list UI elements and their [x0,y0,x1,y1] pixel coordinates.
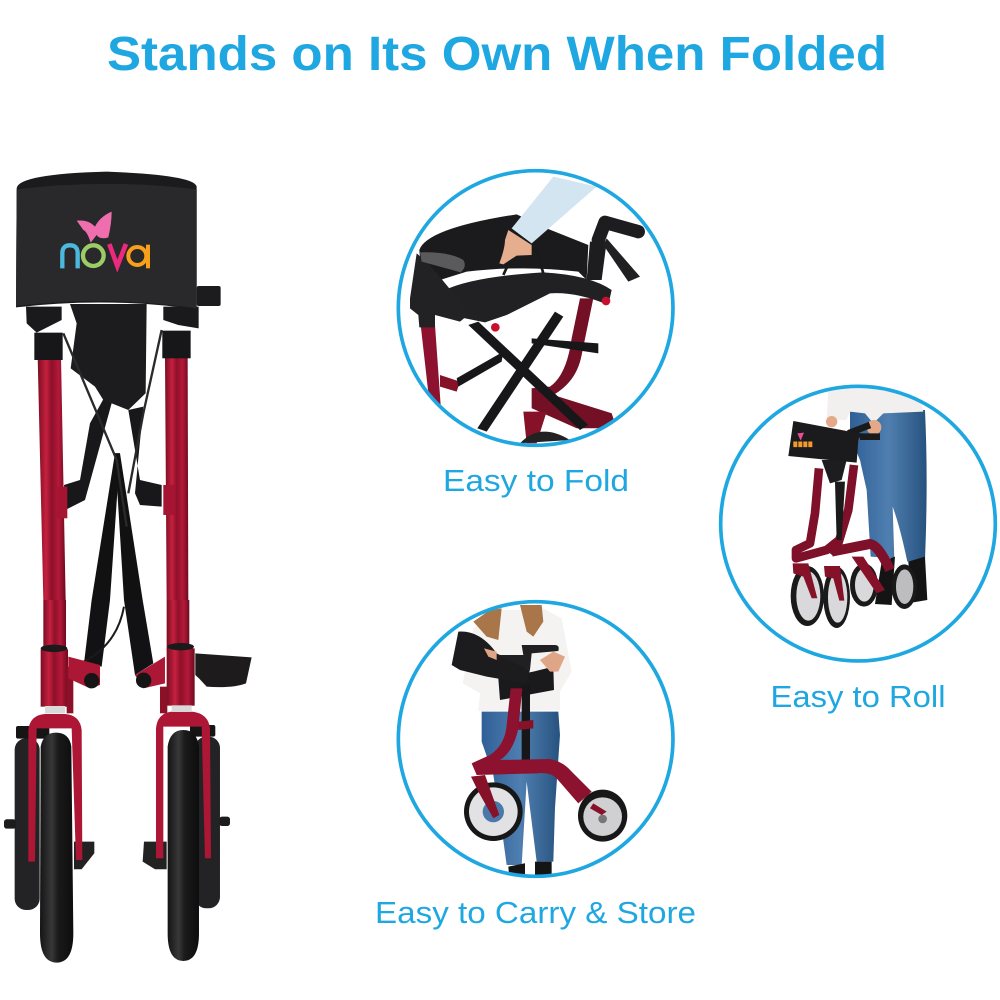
folded bag [452,632,530,683]
butterfly [77,212,112,243]
hinge brackets [68,657,100,688]
sleeve [512,177,597,243]
folding cross bars [468,322,588,430]
label: easy to fold: Easy to Fold [443,463,629,498]
forks [793,557,885,601]
black tube caps [34,333,63,360]
left grip and post [410,253,470,327]
hands [484,648,497,660]
label: easy to roll: Easy to Roll [770,679,946,714]
right handle [598,222,638,240]
hand [499,230,532,264]
sweater [463,608,572,711]
folding struts [92,453,120,600]
circle: easy to fold [398,171,673,445]
walker lower section with wheels [4,600,252,963]
title: Stands on Its Own When Folded [107,28,887,81]
walker red frame [421,325,441,405]
walker frame [796,468,838,558]
boots [908,557,927,603]
label: easy to carry and store: Easy to Carry & Store [375,895,696,930]
boots [508,862,552,874]
seat [437,272,612,322]
jeans [482,712,560,865]
bag [788,421,862,463]
red tubes [43,600,66,650]
under-seat pouch [70,304,147,410]
red tubes [38,357,66,600]
red frame [472,688,592,803]
pull strap [502,268,544,276]
backrest [419,214,588,280]
hands [826,416,837,427]
black bag [26,307,199,333]
front wheels [40,733,73,963]
ring [721,386,995,661]
folded walker front view [4,172,252,963]
wheels [791,563,917,628]
folding black struts [84,600,110,667]
small logo [793,442,812,448]
ring [398,602,673,876]
woman's legs [850,410,927,562]
circle: easy to carry and store [398,602,673,878]
side clip [197,286,221,306]
circle: easy to roll [721,386,995,661]
handle [498,645,559,670]
rear wheels [15,738,40,910]
wheels [464,782,627,842]
walker frame post and pouch [498,667,554,700]
ring [398,171,673,445]
sweater [827,388,923,423]
nova logo [62,212,148,268]
cup holder [195,653,252,687]
front forks [28,714,82,862]
walker upper section with bag [16,172,221,600]
hair [473,605,543,640]
